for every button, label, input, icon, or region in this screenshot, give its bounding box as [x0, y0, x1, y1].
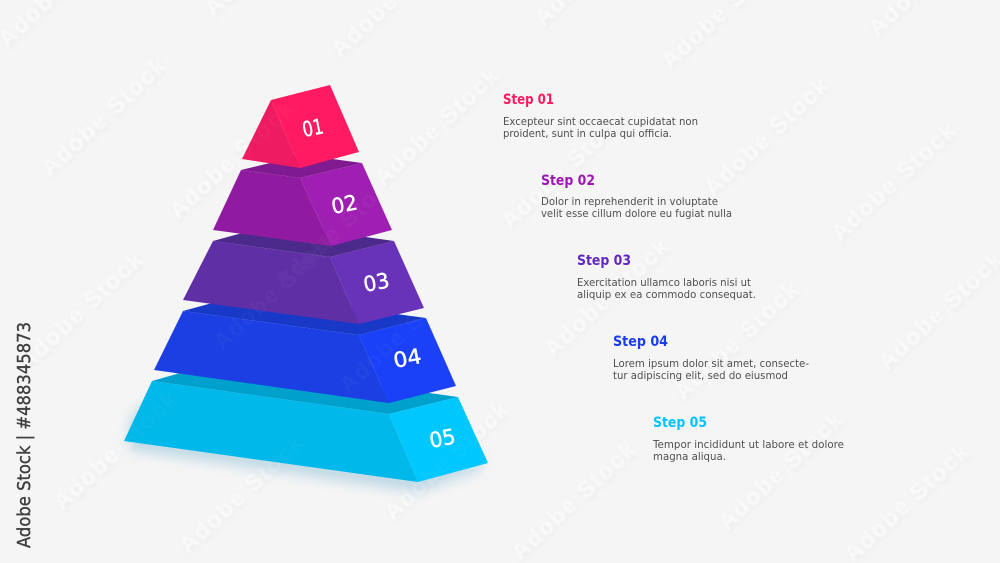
- watermark layer: Adobe Stock: [164, 95, 299, 224]
- watermark over pyramid: Adobe Stock: [174, 429, 309, 558]
- step 05 text: [652, 415, 844, 463]
- step 02 text: velit esse cillum dolore eu fugiat nulla: [541, 207, 732, 220]
- watermark over pyramid: [48, 95, 514, 558]
- step 02 text: [541, 173, 732, 220]
- step 02 text: Step 02: [541, 173, 595, 189]
- step 04 text: Step 04: [613, 334, 668, 350]
- step 05 text: Step 05: [653, 415, 707, 431]
- watermark layer: Adobe Stock: [699, 72, 834, 201]
- step 02 text: Dolor in reprehenderit in voluptate: [541, 195, 718, 208]
- step 01 text: Excepteur sint occaecat cupidatat non: [503, 115, 698, 128]
- step 04 text: [613, 334, 809, 382]
- watermark layer: Adobe Stock: [174, 429, 309, 558]
- number 01: 01: [300, 114, 326, 142]
- block 01: [242, 85, 359, 168]
- watermark layer: Adobe Stock: [506, 436, 641, 563]
- block 04: [154, 294, 456, 403]
- watermark layer: Adobe Stock: [48, 386, 183, 515]
- step 03 text: [577, 253, 756, 301]
- pyramid: [124, 85, 488, 482]
- step 03 text: Step 03: [577, 253, 631, 269]
- pyramid shadow: [130, 400, 482, 490]
- watermark layer: Adobe Stock: [369, 62, 504, 191]
- number 04: 04: [391, 344, 423, 373]
- watermark layer: Adobe Stock: [13, 246, 148, 375]
- watermark over pyramid: Adobe Stock: [208, 226, 343, 355]
- watermark over pyramid: Adobe Stock: [269, 165, 404, 294]
- step 01 text: proident, sunt in culpa qui officia.: [503, 127, 672, 140]
- watermark layer: Adobe Stock: [379, 396, 514, 525]
- watermark over pyramid: Adobe Stock: [334, 269, 469, 398]
- watermark over pyramid: Adobe Stock: [164, 95, 299, 224]
- watermark over pyramid: Adobe Stock: [379, 396, 514, 525]
- stock id vertical text: Adobe Stock | #488345873: [14, 322, 35, 548]
- step 01 text: Step 01: [503, 92, 554, 108]
- block 05: [124, 363, 488, 482]
- watermark layer: Adobe Stock: [669, 276, 804, 405]
- watermark layer: Adobe Stock: [839, 438, 974, 563]
- step 03 text: Exercitation ullamco laboris nisi ut: [577, 276, 752, 289]
- watermark layer: Adobe Stock: [826, 117, 961, 246]
- block 03: [183, 224, 424, 324]
- step 03 text: aliquip ex ea commodo consequat.: [577, 288, 756, 301]
- watermark layer: Adobe Stock: [539, 233, 674, 362]
- step 05 text: Tempor incididunt ut labore et dolore: [652, 438, 844, 451]
- number 05: 05: [427, 424, 457, 453]
- block 02: [213, 155, 392, 246]
- watermark layer: Adobe Stock: [496, 105, 631, 234]
- watermark over pyramid: Adobe Stock: [48, 386, 183, 515]
- step 01 text: [503, 92, 698, 140]
- step 04 text: tur adipiscing elit, sed do eiusmod: [613, 369, 788, 382]
- watermark layer: Adobe Stock: [713, 406, 848, 535]
- number 02: 02: [329, 190, 359, 219]
- number 03: 03: [361, 268, 391, 297]
- step 04 text: Lorem ipsum dolor sit amet, consecte-: [613, 357, 809, 370]
- step 05 text: magna aliqua.: [653, 450, 726, 463]
- watermark layer: Adobe Stock: [36, 52, 171, 181]
